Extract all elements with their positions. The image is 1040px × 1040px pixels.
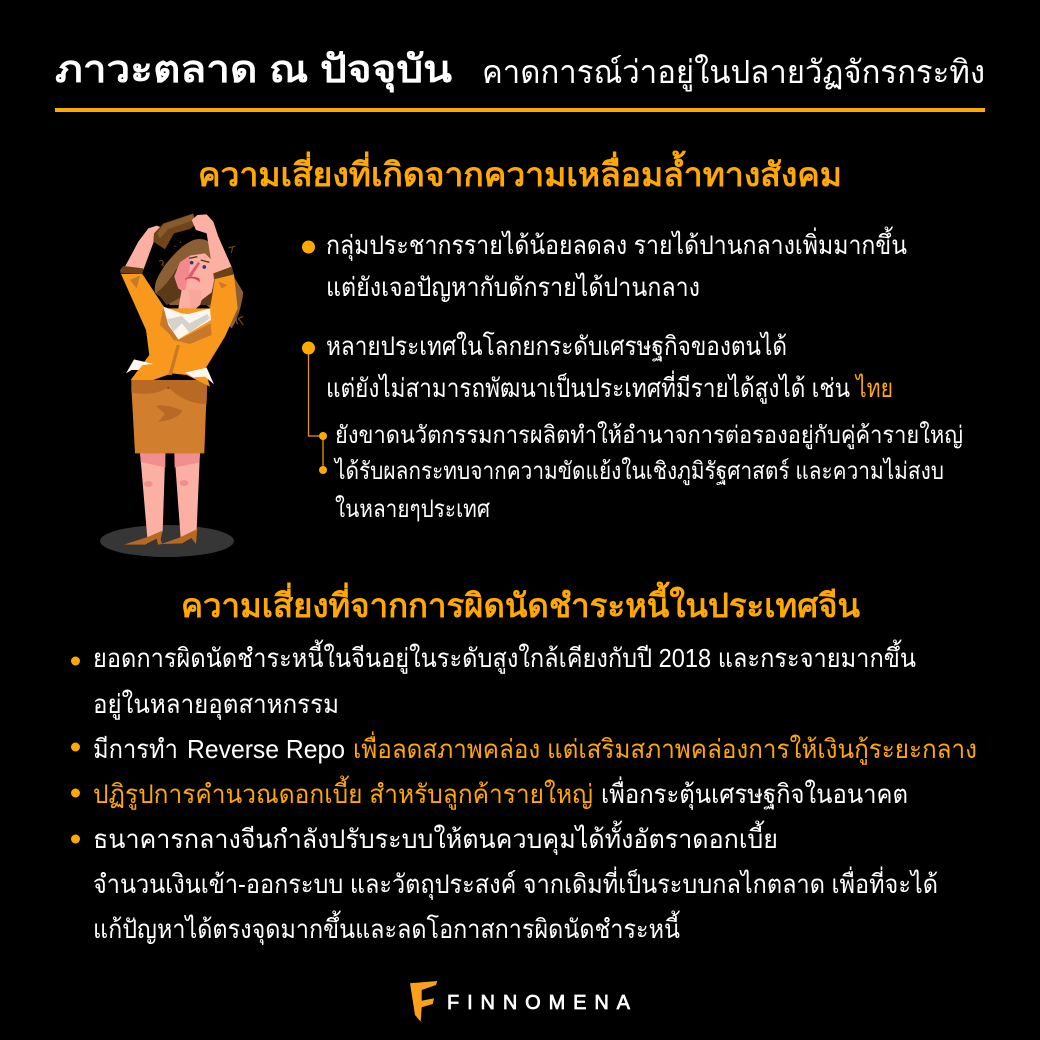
illustration: woman with empty wallet and pockets — [100, 213, 243, 557]
logo: FINNOMENA: FINNOMENA — [447, 992, 631, 1014]
icon: F mark — [410, 981, 437, 1022]
text: upgraded economies — [326, 331, 893, 404]
bullet list: China — [71, 639, 977, 945]
bullet: first point — [302, 240, 315, 254]
sub bullet one — [319, 432, 327, 440]
item: reverse repo: มีการทำ — [93, 734, 178, 764]
text: middle income — [326, 226, 907, 302]
title: คาดการณ์ว่าอยู่ในปลายวัฏจักรกระทิง — [482, 54, 985, 92]
text: middle income: แต่ยังเจอปัญหากับดักรายได้ปานกลาง — [326, 272, 700, 302]
left arm — [125, 226, 164, 270]
item: reverse repo: เพื่อลดสภาพคล่อง แต่เสริมสภาพคล่องการให้เงินกู้ระยะกลาง — [353, 731, 977, 765]
item: defaults: อยู่ในหลายอุตสาหกรรม — [93, 689, 339, 720]
item: central bank — [71, 820, 938, 945]
flying bits — [159, 246, 235, 266]
heading: China default risk: ความเสี่ยงที่จากการผิดนัดชำระหนี้ในประเทศจีน — [181, 581, 860, 624]
text: upgraded economies: แต่ยังไม่สามารถพัฒนาเป็นประเทศที่มีรายได้สูงได้ เช่น — [326, 370, 850, 404]
connector lines — [308, 350, 323, 470]
heading: social inequality risk: ความเสี่ยงที่เกิดจากความเหลื่อมล้ำทางสังคม — [198, 150, 842, 193]
text: upgraded economies: ไทย — [854, 373, 893, 403]
head, hair and arms — [125, 213, 243, 328]
text: upgraded economies: หลายประเทศในโลกยกระดับเศรษฐกิจของตนได้ — [326, 331, 787, 362]
item: interest reform — [71, 775, 908, 810]
bullet: second point — [302, 342, 315, 354]
item: central bank: แก้ปัญหาได้ตรงจุดมากขึ้นและลดโอกาสการผิดนัดชำระหนี้ — [93, 910, 680, 945]
cuffs — [120, 266, 143, 274]
item: defaults: ยอดการผิดนัดชำระหนี้ในจีนอยู่ในระดับสูงใกล้เคียงกับปี 2018 และกระจายมากขึ้น — [93, 639, 916, 674]
wallet — [153, 213, 195, 249]
jacket, collar and pockets — [120, 266, 243, 387]
item: interest reform: ปฏิรูปการคำนวณดอกเบี้ย สำหรับลูกค้ารายใหญ่ — [93, 775, 593, 810]
title: ภาวะตลาด ณ ปัจจุบัน — [55, 49, 452, 93]
sub text: geopolitics: ได้รับผลกระทบจากความขัดแย้งในเชิงภูมิรัฐศาสตร์ และความไม่สงบ — [333, 457, 944, 486]
face — [174, 253, 214, 305]
logo: FINNOMENA — [410, 981, 631, 1022]
title underline — [55, 108, 985, 112]
item: interest reform: เพื่อกระตุ้นเศรษฐกิจในอนาคต — [601, 776, 908, 810]
sub text: geopolitics — [333, 457, 944, 523]
item: reverse repo — [71, 731, 977, 765]
sub text: innovation: ยังขาดนวัตกรรมการผลิตทำให้อำนาจการต่อรองอยู่กับคู่ค้ารายใหญ่ — [335, 421, 963, 450]
sub text: geopolitics: ในหลายๆประเทศ — [335, 495, 490, 523]
text: middle income: กลุ่มประชากรรายได้น้อยลดลง รายได้ปานกลางเพิ่มมากขึ้น — [326, 226, 907, 261]
item: central bank: ธนาคารกลางจีนกำลังปรับระบบให้ตนควบคุมได้ทั้งอัตราดอกเบี้ย — [93, 820, 778, 855]
title — [55, 49, 985, 93]
item: defaults — [71, 639, 916, 720]
item: reverse repo: Reverse Repo — [187, 734, 345, 764]
legs and skirt — [124, 380, 207, 545]
sub bullet two — [319, 466, 327, 474]
item: central bank: จำนวนเงินเข้า-ออกระบบ และวัตถุประสงค์ จากเดิมที่เป็นระบบกลไกตลาด เพื่อที่จะได้ — [93, 866, 938, 900]
shadow — [100, 525, 234, 557]
